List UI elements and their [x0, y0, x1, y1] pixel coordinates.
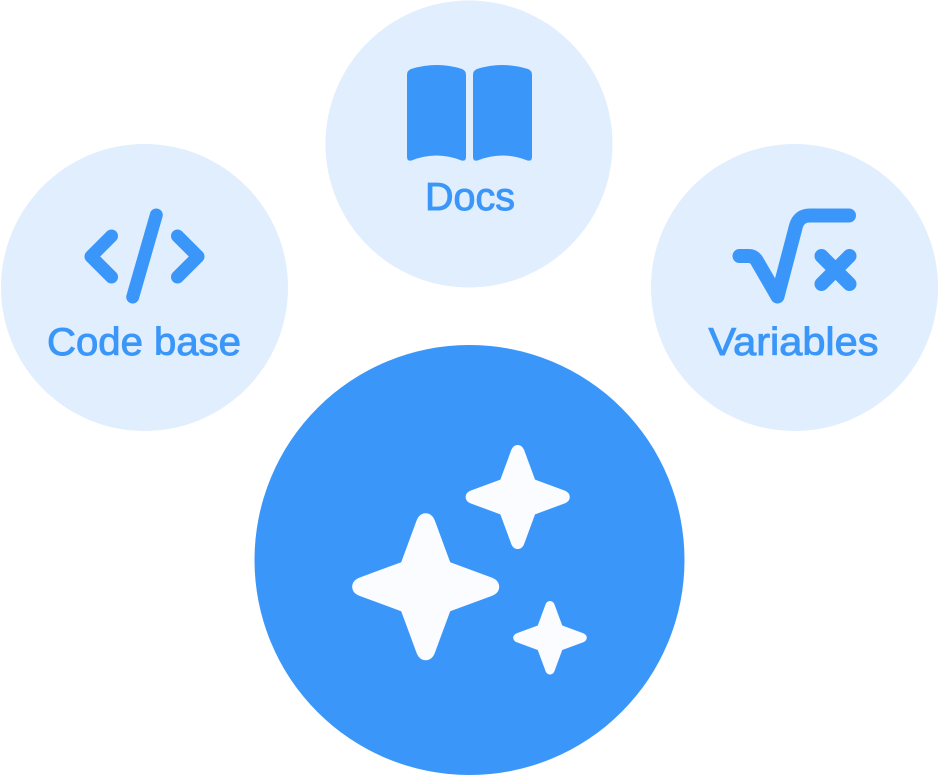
- panel: AI sparkle: [254, 345, 684, 775]
- icon: square root of x: [740, 216, 850, 296]
- panel: variables: [651, 144, 938, 431]
- panel: code base: [1, 144, 288, 431]
- label: Docs: Docs: [425, 176, 515, 219]
- label: Variables: Variables: [708, 321, 878, 364]
- label: Code base: Code base: [47, 321, 241, 364]
- icon: open book: [407, 65, 532, 161]
- panel: docs: [326, 0, 612, 288]
- icon: sparkles: [352, 445, 587, 674]
- icon: code brackets: [91, 215, 198, 297]
